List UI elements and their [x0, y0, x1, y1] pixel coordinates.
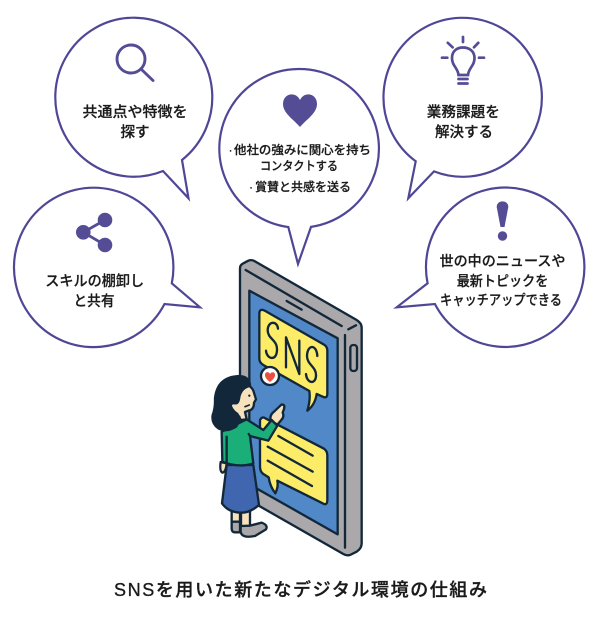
panel: news bubble: [397, 188, 584, 347]
icon: exclamation mark: [497, 201, 508, 241]
text: idea: 解決する: [435, 124, 493, 141]
chat bubble: SNS: [259, 310, 327, 411]
icon: heart badge: [261, 367, 279, 385]
text: idea: 業務課題を: [427, 104, 500, 121]
text: heart: [228, 142, 371, 194]
icon: magnifier: [117, 45, 153, 80]
arm left: [220, 462, 227, 473]
phone body: [240, 260, 362, 555]
text: heart: ·: [228, 143, 233, 157]
text: heart: ·: [249, 180, 253, 194]
text: heart: コンタクトする: [260, 159, 338, 173]
panel: search bubble: [55, 18, 212, 198]
phone screen: [249, 291, 338, 534]
text: search: [82, 104, 188, 141]
text: news: 最新トピックを: [457, 273, 548, 290]
icon: share: [76, 213, 112, 252]
text: share: と共有: [74, 293, 114, 310]
icon: light bulb: [442, 37, 484, 84]
text: search: 共通点や特徴を: [82, 104, 188, 121]
hair: [212, 376, 250, 430]
chat bubble: lines: [260, 417, 327, 504]
icon: heart: [283, 94, 317, 127]
skirt: [222, 465, 259, 513]
text: search: 探す: [120, 124, 150, 141]
title: SNSを用いた新たなデジタル環境の仕組み: [114, 579, 487, 600]
text: news: キャッチアップできる: [440, 292, 562, 309]
text: idea: [427, 104, 500, 141]
text: heart: 賞賛と共感を送る: [255, 179, 351, 194]
sweater: [222, 419, 277, 465]
text: share: スキルの棚卸し: [45, 273, 144, 290]
panel: idea bubble: [383, 18, 542, 198]
panel: share bubble: [14, 188, 200, 347]
text: share: [45, 273, 144, 310]
legs and shoes: [232, 510, 250, 527]
illustration: phone and person: [212, 260, 362, 555]
text: news: [440, 253, 566, 309]
text: heart: 他社の強みに関心を持ち: [234, 142, 371, 157]
panel: heart bubble: [219, 69, 379, 264]
person: [212, 376, 284, 537]
neck and face: [231, 385, 256, 420]
hand: [270, 405, 284, 425]
text: news: 世の中のニュースや: [440, 253, 566, 270]
